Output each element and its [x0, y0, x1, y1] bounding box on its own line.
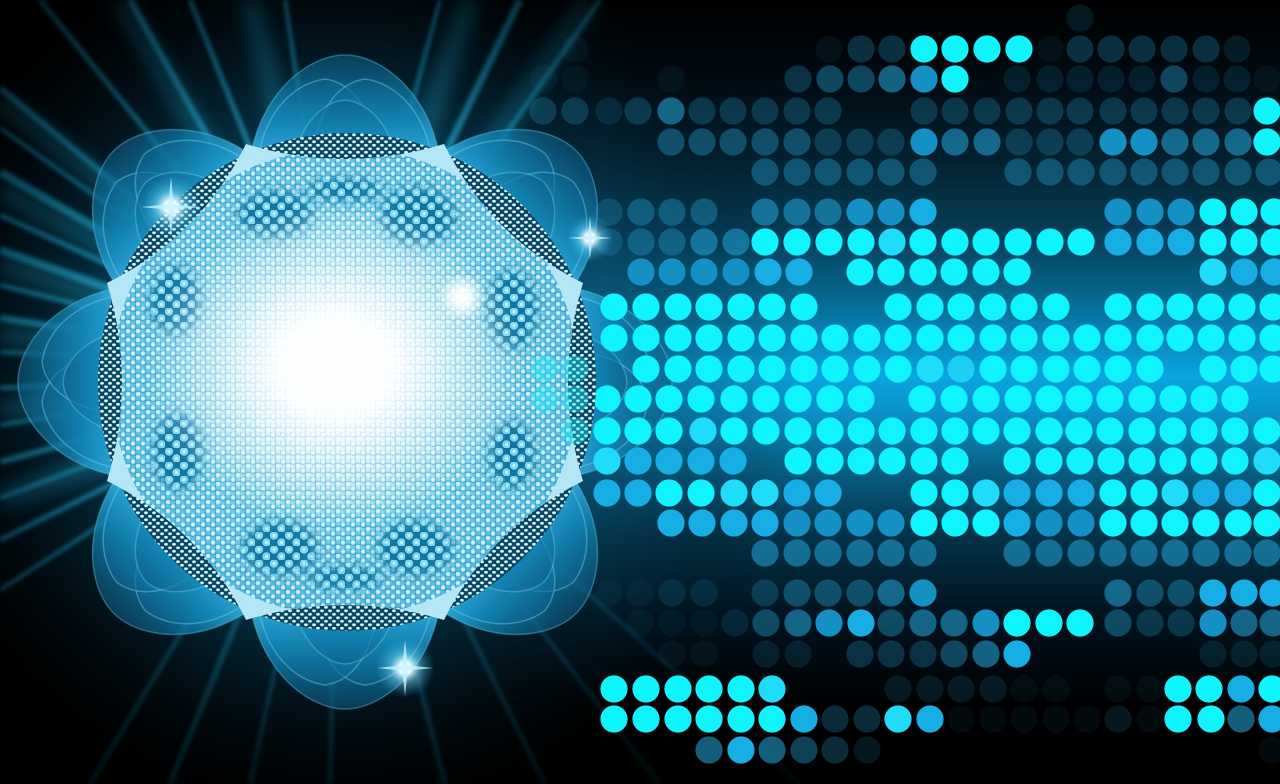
sphere body with cell texture	[118, 154, 572, 610]
white core glow	[145, 203, 525, 526]
petals: eight translucent lobes	[18, 55, 672, 709]
ambient glow around sphere	[0, 0, 1000, 784]
dot row 21	[658, 640, 1280, 668]
dot row 5	[657, 128, 1280, 156]
dot row 7	[595, 198, 1280, 226]
dot row 15	[593, 447, 1280, 475]
dot row 1	[1066, 4, 1094, 32]
dot row 18	[751, 539, 1280, 567]
sparkle: bottom	[375, 638, 435, 698]
dot row 19	[595, 579, 1280, 607]
dot row 16	[593, 479, 1280, 507]
dot row 23	[600, 705, 1280, 733]
dot row 20	[626, 609, 1280, 637]
dot row 22	[600, 675, 1280, 703]
sparkle: upper right	[566, 214, 614, 262]
dot row 12	[632, 355, 1280, 383]
dot row 24	[695, 736, 1280, 764]
dot row 17	[657, 509, 1280, 537]
dot row 8	[595, 228, 1280, 256]
dark cell clusters	[141, 168, 548, 600]
dot row 3	[530, 65, 1280, 93]
dot row 10	[600, 293, 1280, 321]
sparkle: on sphere	[438, 273, 486, 321]
mesh sphere behind star	[98, 133, 596, 631]
wide soft rays	[0, 0, 590, 500]
dot row 9	[627, 258, 1280, 286]
dot row 6	[751, 158, 1280, 186]
sparkle: upper left	[139, 175, 203, 239]
star tips: pale star base	[107, 144, 583, 620]
light rays	[0, 0, 800, 784]
dot matrix	[529, 4, 1280, 764]
dot row 14	[593, 417, 1280, 445]
cyan dots overlapping sphere edge	[531, 355, 589, 445]
dot row 4	[529, 97, 1280, 125]
dot row 13	[593, 385, 1249, 413]
dot row 2	[561, 35, 1251, 63]
background glow band	[520, 40, 1280, 682]
dot row 11	[600, 324, 1280, 352]
